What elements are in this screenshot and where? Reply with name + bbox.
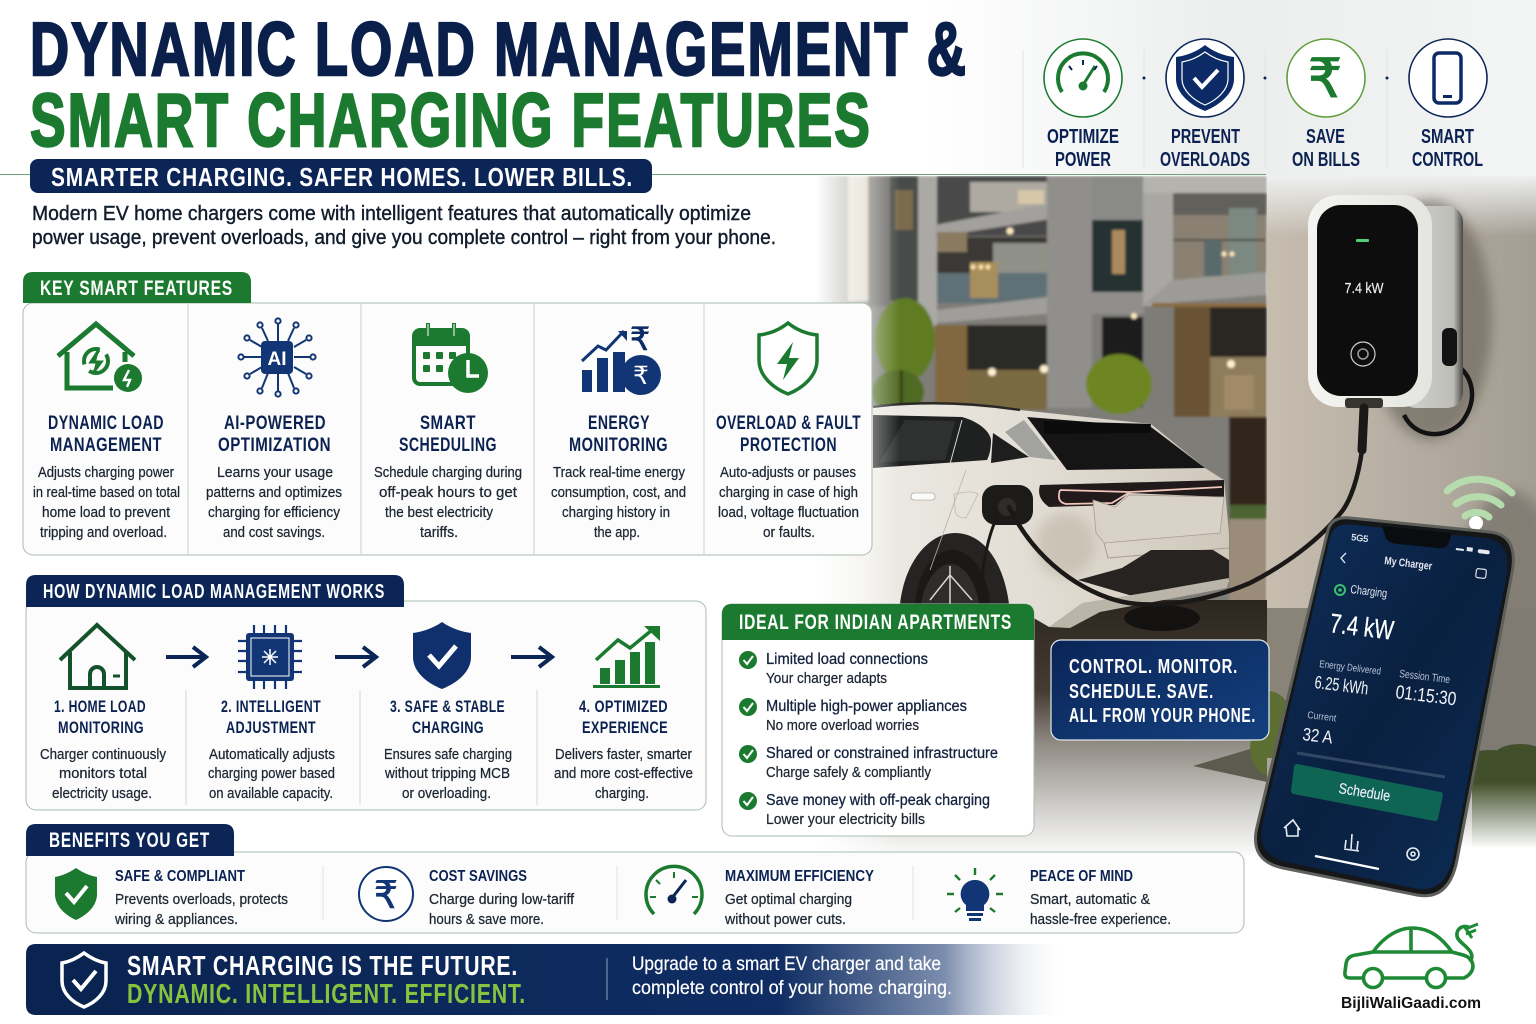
icon: bars, rupee and trend arrow: ₹ (633, 361, 649, 390)
icon row labels (1047, 126, 1483, 171)
icon row labels: PREVENT (1171, 126, 1240, 148)
phone control callout: ALL FROM YOUR PHONE. (1069, 705, 1256, 727)
item: multiple appliances: No more overload worries (766, 717, 919, 734)
intro text: Modern EV home chargers come with intelligent features that automatically optimize (32, 203, 751, 225)
step 4: optimized experience: 4. OPTIMIZED (579, 697, 668, 716)
wall charger: 7.4 kW (1344, 280, 1384, 297)
feature: smart scheduling: Schedule charging during (374, 464, 522, 481)
feature: overload and fault protection (716, 323, 861, 541)
icon row labels: ON BILLS (1292, 149, 1360, 171)
item: save money (739, 792, 990, 828)
schedule button: Schedule (1337, 780, 1391, 805)
arrow (335, 647, 376, 667)
icon row labels: POWER (1055, 149, 1111, 171)
icon row labels: OPTIMIZE (1047, 126, 1119, 148)
benefit: cost savings: ₹ (374, 873, 398, 917)
icon: rising bar chart (593, 626, 660, 688)
panel heading (722, 604, 1034, 640)
feature: smart scheduling: SCHEDULING (399, 435, 497, 456)
panel: ideal for indian apartments (722, 604, 1034, 836)
intro text (32, 203, 776, 249)
feature: smart scheduling (374, 323, 522, 541)
step 1: home load monitoring (40, 625, 166, 802)
icon: bars, rupee and trend arrow: ₹ (630, 320, 650, 358)
app metrics: Energy Delivered (1319, 659, 1382, 678)
arrow (511, 647, 552, 667)
step 4: optimized experience: and more cost-effective (554, 765, 693, 782)
step 1: home load monitoring: 1. HOME LOAD (54, 697, 146, 716)
benefit: maximum efficiency: without power cuts. (724, 911, 846, 928)
step 4: optimized experience: Delivers faster, smarter (555, 746, 692, 763)
step 3: safe and stable charging: or overloading. (402, 785, 491, 802)
item: multiple appliances (739, 698, 967, 734)
icon: house with charging badge (58, 324, 142, 392)
closing banner: complete control of your home charging. (632, 978, 952, 999)
benefit: cost savings: COST SAVINGS (429, 868, 527, 885)
panel heading: IDEAL FOR INDIAN APARTMENTS (739, 611, 1012, 634)
item: save money: Save money with off-peak charging (766, 792, 990, 809)
heading tab: benefits (26, 824, 234, 856)
icon: shield with check (413, 622, 471, 689)
item: limited load (739, 651, 928, 687)
app nav icons (1284, 820, 1419, 869)
icon row labels: OVERLOADS (1160, 149, 1250, 171)
heading tab: key smart features (23, 272, 251, 303)
step 2: intelligent adjustment: 2. INTELLIGENT (221, 697, 321, 716)
phone control callout (1051, 640, 1269, 740)
icon: calendar with clock (414, 323, 488, 393)
app metrics: 01:15:30 (1394, 682, 1457, 710)
feature: smart scheduling: SMART (420, 413, 476, 434)
icon: house (60, 625, 135, 688)
feature: ai-powered optimization: charging for efficiency (208, 504, 340, 521)
feature: overload and fault protection: charging in case of high (719, 484, 858, 501)
heading tab: benefits: BENEFITS YOU GET (49, 829, 210, 852)
step 2: intelligent adjustment: ADJUSTMENT (226, 718, 316, 737)
arrow (166, 647, 206, 667)
icon: bars, rupee and trend arrow (582, 320, 661, 395)
step 3: safe and stable charging: CHARGING (412, 718, 484, 737)
feature: ai-powered optimization: and cost savings. (223, 524, 325, 541)
feature: dynamic load management: tripping and overload. (40, 524, 167, 541)
benefit: maximum efficiency: Get optimal charging (725, 891, 852, 908)
item: shared infrastructure: Charge safely & compliantly (766, 764, 931, 781)
benefit: maximum efficiency (646, 866, 874, 928)
right shrub (1460, 744, 1536, 853)
feature: overload and fault protection: Auto-adjusts or pauses (720, 464, 856, 481)
phone control callout: CONTROL. MONITOR. (1069, 656, 1238, 678)
benefit: safe and compliant (55, 868, 288, 928)
feature: ai-powered optimization: OPTIMIZATION (218, 435, 331, 456)
app metrics: 6.25 kWh (1314, 672, 1370, 699)
feature: overload and fault protection: or faults. (763, 524, 815, 541)
main title: DYNAMIC LOAD MANAGEMENT & (30, 7, 968, 91)
feature: energy monitoring: charging history in (562, 504, 670, 521)
main title: SMART CHARGING FEATURES (30, 78, 872, 162)
benefit: maximum efficiency: MAXIMUM EFFICIENCY (725, 868, 874, 885)
step 3: safe and stable charging: Ensures safe charging (384, 746, 512, 763)
item: save money: Lower your electricity bills (766, 811, 925, 828)
icon: processor chip (238, 625, 302, 689)
feature: energy monitoring (551, 320, 686, 541)
notch (1382, 526, 1452, 548)
heading tab: how it works (26, 575, 404, 607)
feature: dynamic load management: DYNAMIC LOAD (48, 413, 164, 434)
benefit: safe and compliant: wiring & appliances. (114, 911, 238, 928)
wifi signal icon (1447, 479, 1512, 526)
top benefit icons row (1023, 39, 1487, 171)
feature: energy monitoring: consumption, cost, and (551, 484, 686, 501)
car (800, 403, 1229, 631)
step 2: intelligent adjustment (208, 625, 335, 802)
logo: BijliWaliGaadi.com (1341, 924, 1481, 1012)
item: limited load: Limited load connections (766, 651, 928, 668)
item: shared infrastructure (739, 745, 998, 781)
charging cable (980, 408, 1364, 604)
icon: ai chip (238, 318, 316, 397)
step 4: optimized experience (554, 626, 693, 802)
main title (30, 7, 968, 162)
app metrics: 32 A (1302, 724, 1334, 748)
icon: shield with bolt (759, 323, 817, 394)
app metrics: Current (1307, 710, 1337, 725)
feature: ai-powered optimization (206, 318, 342, 541)
item: shared infrastructure: Shared or constrained infrastructure (766, 745, 998, 762)
phone control callout: SCHEDULE. SAVE. (1069, 681, 1214, 703)
icon: save on bills rupee (1287, 39, 1365, 117)
step 4: optimized experience: charging. (595, 785, 649, 802)
icon: shield with check (62, 953, 106, 1007)
benefit: peace of mind: Smart, automatic & (1030, 891, 1150, 908)
benefit: cost savings: hours & save more. (429, 911, 544, 928)
icon: smart control phone (1409, 39, 1487, 117)
background behind car to the right (1229, 417, 1267, 507)
step 1: home load monitoring: electricity usage. (52, 785, 152, 802)
feature: energy monitoring: MONITORING (569, 435, 668, 456)
benefit: peace of mind (947, 868, 1171, 928)
thin header rule (0, 174, 1266, 175)
app status (1335, 582, 1388, 600)
wall and ground behind charger (1193, 176, 1536, 938)
feature: dynamic load management: MANAGEMENT (50, 435, 162, 456)
icon: save on bills rupee: ₹ (1308, 47, 1342, 110)
heading tab: key smart features: KEY SMART FEATURES (40, 277, 233, 300)
feature: ai-powered optimization: AI-POWERED (224, 413, 326, 434)
icon row labels: CONTROL (1412, 149, 1483, 171)
app metrics (1302, 659, 1457, 748)
phone screen (1261, 524, 1508, 889)
step 1: home load monitoring: MONITORING (58, 718, 144, 737)
feature: smart scheduling: off-peak hours to get (379, 484, 518, 501)
step 1: home load monitoring: monitors total (59, 765, 147, 782)
wall charger (1308, 195, 1492, 440)
feature: energy monitoring: ENERGY (588, 413, 650, 434)
icon row labels: SMART (1421, 126, 1474, 148)
panel: how dynamic load management works (26, 575, 706, 810)
feature: dynamic load management: home load to prevent (42, 504, 171, 521)
left fade (780, 176, 898, 852)
step 4: optimized experience: EXPERIENCE (582, 718, 668, 737)
benefit: safe and compliant: SAFE & COMPLIANT (115, 868, 245, 885)
feature: ai-powered optimization: Learns your usage (217, 464, 333, 481)
closing banner: SMART CHARGING IS THE FUTURE. (127, 950, 518, 981)
step 3: safe and stable charging (384, 622, 512, 802)
ground under car (851, 600, 1267, 852)
feature: ai-powered optimization: patterns and optimizes (206, 484, 342, 501)
closing banner (26, 944, 1070, 1015)
heading tab: how it works: HOW DYNAMIC LOAD MANAGEMENT WORKS (43, 581, 385, 603)
icon row labels: SAVE (1306, 126, 1345, 148)
step 2: intelligent adjustment: on available capacity. (209, 785, 333, 802)
step 2: intelligent adjustment: charging power based (208, 765, 335, 782)
tagline pill: SMARTER CHARGING. SAFER HOMES. LOWER BILLS. (51, 162, 633, 192)
benefit: safe and compliant: Prevents overloads, protects (115, 891, 288, 908)
logo: BijliWaliGaadi.com: BijliWaliGaadi.com (1341, 995, 1481, 1012)
panel: benefits you get (26, 824, 1244, 933)
benefit: cost savings (359, 867, 575, 928)
item: multiple appliances: Multiple high-power appliances (766, 698, 967, 715)
feature: smart scheduling: tariffs. (420, 524, 458, 541)
benefit: cost savings: Charge during low-tariff (429, 891, 575, 908)
step 3: safe and stable charging: 3. SAFE & STABLE (390, 697, 505, 716)
app power reading: 7.4 kW (1328, 608, 1396, 646)
feature: dynamic load management: Adjusts charging power (38, 464, 174, 481)
status bar (1351, 532, 1490, 554)
feature: overload and fault protection: load, voltage fluctuation (718, 504, 859, 521)
closing banner: DYNAMIC. INTELLIGENT. EFFICIENT. (127, 978, 526, 1009)
smartphone with charging app (1255, 518, 1513, 896)
feature: smart scheduling: the best electricity (385, 504, 493, 521)
feature: overload and fault protection: OVERLOAD & FAULT (716, 413, 861, 434)
app title: My Charger (1384, 555, 1433, 573)
feature: dynamic load management: in real-time based on total (33, 484, 180, 501)
panel: key smart features (23, 272, 872, 555)
left shrub (1246, 691, 1294, 776)
step 3: safe and stable charging: without tripping MCB (384, 765, 510, 782)
status bar: 5G5 (1351, 532, 1369, 544)
icon: ai chip: AI (268, 349, 286, 370)
hero photo: apartment building and car (822, 176, 1267, 852)
feature: dynamic load management (33, 324, 180, 541)
app status: Charging (1350, 582, 1388, 600)
feature: overload and fault protection: PROTECTION (740, 435, 837, 456)
item: limited load: Your charger adapts (766, 670, 887, 687)
feature: energy monitoring: Track real-time energy (553, 464, 685, 481)
benefit: peace of mind: hassle-free experience. (1030, 911, 1171, 928)
step 2: intelligent adjustment: Automatically adjusts (209, 746, 335, 763)
icon: optimize power gauge (1044, 39, 1122, 117)
app metrics: Session Time (1399, 668, 1451, 686)
schedule button (1294, 767, 1440, 818)
benefit: peace of mind: PEACE OF MIND (1030, 868, 1133, 885)
closing banner: Upgrade to a smart EV charger and take (632, 954, 941, 975)
step 1: home load monitoring: Charger continuously (40, 746, 166, 763)
icon: prevent overloads shield (1166, 39, 1244, 117)
intro text: power usage, prevent overloads, and give you complete control – right from your phone. (32, 227, 776, 249)
feature: energy monitoring: the app. (594, 524, 640, 541)
